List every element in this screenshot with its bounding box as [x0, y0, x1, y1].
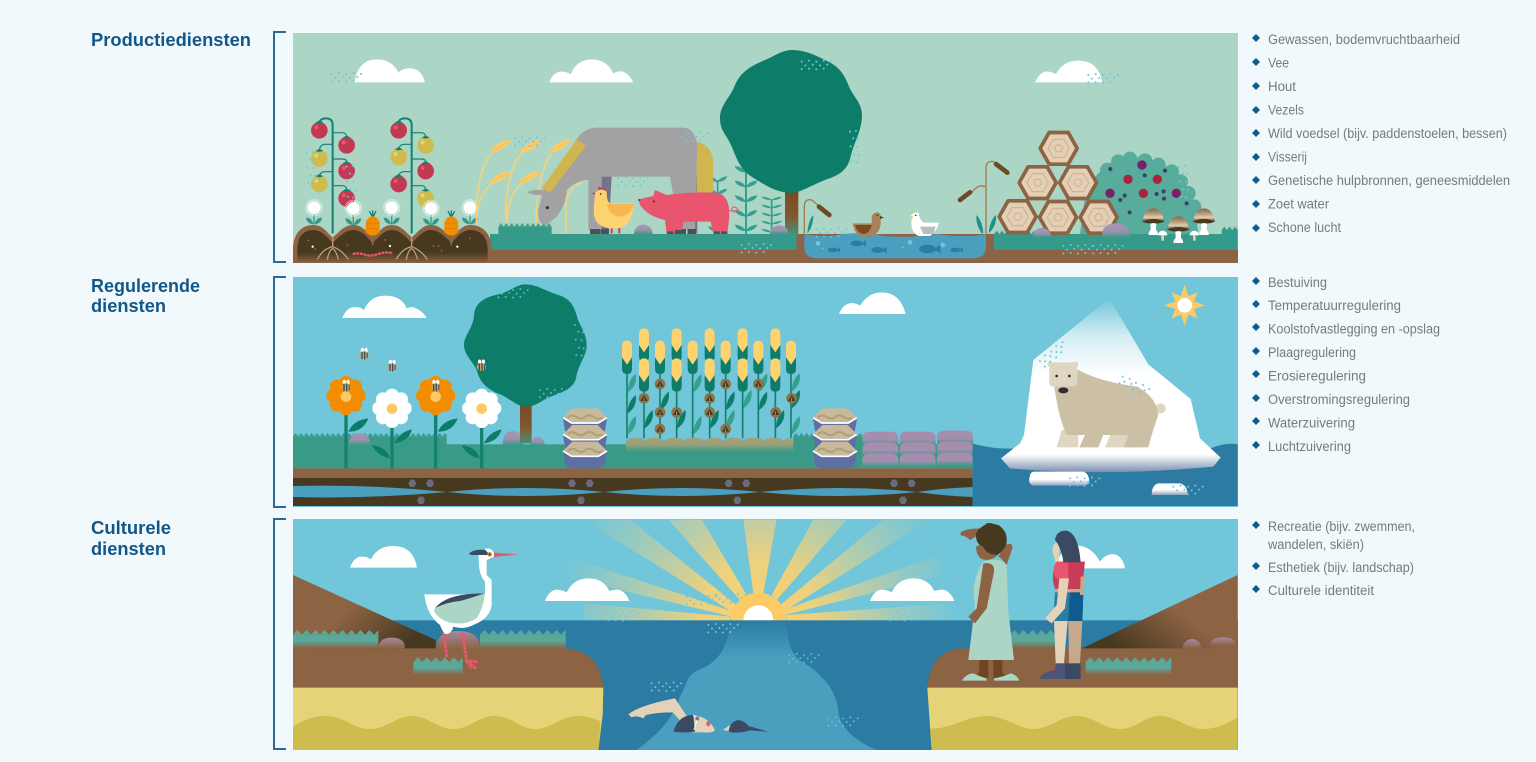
list: productiediensten: Visserij	[1268, 150, 1307, 164]
heading: Culturele diensten	[91, 518, 171, 559]
carrots	[366, 210, 458, 247]
heading: Culturele diensten: diensten	[91, 539, 166, 559]
stipple dots	[497, 288, 1204, 495]
clouds	[350, 546, 1125, 601]
list: productiediensten: Genetische hulpbronnen, geneesmiddelen	[1268, 173, 1510, 188]
list: culturele diensten: Culturele identiteit	[1268, 583, 1374, 598]
bracket: Productiediensten	[274, 32, 286, 262]
duck	[853, 212, 884, 237]
heading: Productiediensten: Productiediensten	[91, 30, 251, 50]
panel: culturele diensten illustration	[293, 519, 1238, 750]
grass strip	[490, 234, 1238, 249]
list: regulerende diensten: Erosieregulering	[1268, 368, 1366, 384]
ice floes	[1029, 472, 1188, 495]
list: regulerende diensten: Overstromingsregulering	[1268, 392, 1410, 407]
list: productiediensten: Hout	[1268, 79, 1296, 94]
gull	[908, 212, 939, 236]
woman in green dress	[961, 523, 1019, 681]
list: productiediensten: Gewassen, bodemvruchtbaarheid	[1268, 32, 1460, 47]
heading: Regulerende diensten	[91, 276, 200, 316]
left hill	[293, 575, 436, 649]
left sand	[293, 688, 603, 750]
list: regulerende diensten: Bestuiving	[1268, 275, 1327, 290]
grass tuft	[498, 223, 552, 235]
pond banks	[797, 234, 805, 251]
stipple dots	[607, 593, 920, 727]
list: culturele diensten: wandelen, skiën)	[1267, 537, 1364, 552]
tree crown	[464, 284, 587, 407]
list: regulerende diensten: Temperatuurregulering	[1268, 298, 1401, 313]
right sand	[927, 688, 1238, 750]
wheat	[477, 137, 582, 233]
right bank	[927, 648, 1238, 688]
corn field	[622, 328, 800, 452]
harvest baskets right	[813, 408, 857, 468]
foreground grass tuft	[413, 657, 463, 675]
list: productiediensten: Wild voedsel (bijv. paddenstoelen, bessen)	[1268, 126, 1507, 141]
sky	[293, 277, 1238, 507]
heading: Culturele diensten: Culturele	[91, 518, 171, 538]
right hill	[1082, 575, 1238, 649]
left grass	[293, 630, 566, 648]
clouds	[354, 59, 1102, 82]
tree trunk	[785, 192, 798, 234]
sky	[293, 519, 1238, 621]
harvest baskets left	[563, 408, 607, 468]
list: regulerende diensten: Plaagregulering	[1268, 345, 1356, 360]
list: productiediensten: Vezels	[1268, 102, 1304, 118]
sun	[1164, 285, 1205, 326]
panel: regulerende diensten illustration	[293, 277, 1238, 507]
log pile	[999, 132, 1117, 233]
rocks	[348, 431, 545, 445]
rock	[634, 225, 653, 234]
back grass	[1010, 630, 1055, 648]
list: culturele diensten: Recreatie (bijv. zwemmen,	[1268, 519, 1415, 534]
list: regulerende diensten: Koolstofvastlegging en -opslag	[1268, 322, 1440, 336]
foreground grass	[1086, 657, 1171, 675]
grass layers	[293, 433, 973, 468]
sky	[293, 33, 1238, 263]
tree crown	[720, 50, 862, 193]
list: productiediensten: Vee	[1268, 56, 1289, 70]
heron	[424, 548, 518, 669]
panel: productiediensten illustration	[293, 33, 1238, 263]
sun rays	[565, 520, 967, 620]
iceberg	[1001, 298, 1221, 472]
left bank	[293, 648, 603, 688]
list: regulerende diensten: Waterzuivering	[1268, 416, 1355, 430]
left sand waves	[293, 716, 601, 750]
cloud left	[342, 296, 427, 318]
pond	[797, 233, 994, 258]
bracket: Regulerende diensten	[274, 277, 286, 507]
berry bush	[1080, 152, 1201, 234]
list: productiediensten	[1252, 32, 1510, 235]
sea	[293, 620, 1238, 750]
stipple dots	[306, 60, 1189, 255]
left rocks	[378, 631, 480, 649]
setting sun	[731, 593, 786, 620]
list: regulerende diensten: Luchtzuivering	[1268, 439, 1351, 454]
mushrooms	[1142, 208, 1215, 243]
cloud right	[839, 292, 906, 314]
list: regulerende diensten	[1252, 275, 1440, 454]
list: productiediensten: Schone lucht	[1268, 220, 1341, 235]
pig	[638, 190, 738, 234]
soil mounds	[293, 225, 492, 263]
leaf plants	[708, 166, 782, 234]
list: culturele diensten: Esthetiek (bijv. landschap)	[1268, 560, 1414, 575]
right sand waves	[930, 716, 1238, 750]
swimmer	[628, 698, 768, 733]
sea	[973, 444, 1238, 506]
heading: Regulerende diensten: Regulerende	[91, 276, 200, 296]
bracket: Culturele diensten	[274, 519, 286, 749]
woman in red top	[1039, 531, 1085, 679]
bees	[341, 348, 486, 391]
dandelions	[306, 200, 478, 225]
right rocks	[1183, 637, 1236, 648]
list: productiediensten: Zoet water	[1268, 196, 1329, 212]
purple stones	[862, 431, 973, 467]
tomato plants	[311, 118, 434, 233]
list: culturele diensten	[1252, 519, 1415, 598]
river	[637, 621, 877, 750]
polar bear	[1048, 362, 1166, 447]
donkey	[527, 128, 713, 234]
heading: Regulerende diensten: diensten	[91, 296, 166, 316]
rocks	[1033, 223, 1130, 237]
grass right	[994, 227, 1238, 235]
reeds	[804, 161, 1007, 234]
ground	[487, 249, 1238, 263]
chicken	[592, 187, 634, 233]
soil layers	[293, 468, 973, 506]
flowers	[326, 376, 502, 468]
tree trunk	[520, 405, 532, 443]
rock near tree	[770, 225, 789, 234]
